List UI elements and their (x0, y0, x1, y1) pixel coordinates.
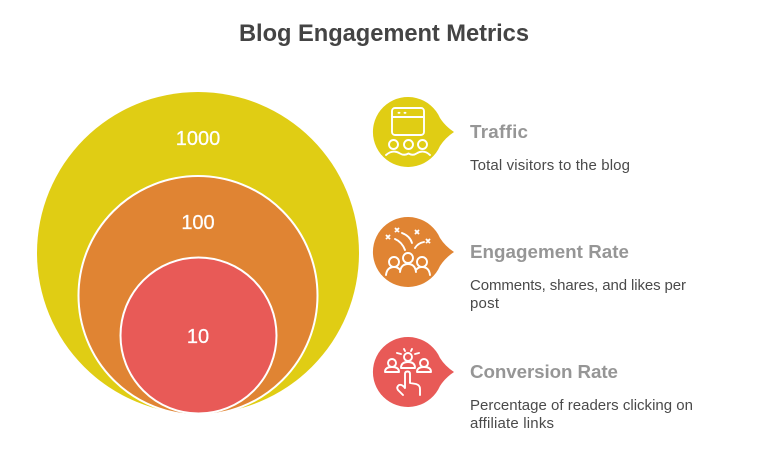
nested circle chart (37, 92, 359, 415)
heading: engagement rate: Engagement Rate (470, 241, 629, 262)
circle: 10 conversion: 10 (187, 326, 209, 348)
circle: 100 engagement (78, 176, 318, 415)
icon: celebrating audience (373, 217, 454, 287)
panel: engagement rate: post (470, 295, 500, 312)
circle: 1000 traffic: 1000 (176, 128, 220, 150)
description: traffic: Total visitors to the blog (470, 157, 630, 174)
icon: browser window and audience (373, 97, 454, 167)
heading: conversion rate: Conversion Rate (470, 361, 618, 382)
heading: traffic: Traffic (470, 121, 528, 142)
description: engagement rate: Comments, shares, and likes per (470, 277, 686, 294)
icon: hand pointing at people (373, 337, 454, 407)
description: conversion rate: Percentage of readers clicking on (470, 397, 693, 414)
circle: 100 engagement: 100 (181, 212, 215, 234)
panel: engagement rate (373, 217, 686, 312)
panel: conversion rate (373, 337, 693, 432)
title: Blog Engagement Metrics (239, 21, 529, 47)
panel: conversion rate: affiliate links (470, 415, 554, 432)
panel: traffic (373, 97, 630, 174)
circle: 10 conversion (120, 258, 276, 414)
